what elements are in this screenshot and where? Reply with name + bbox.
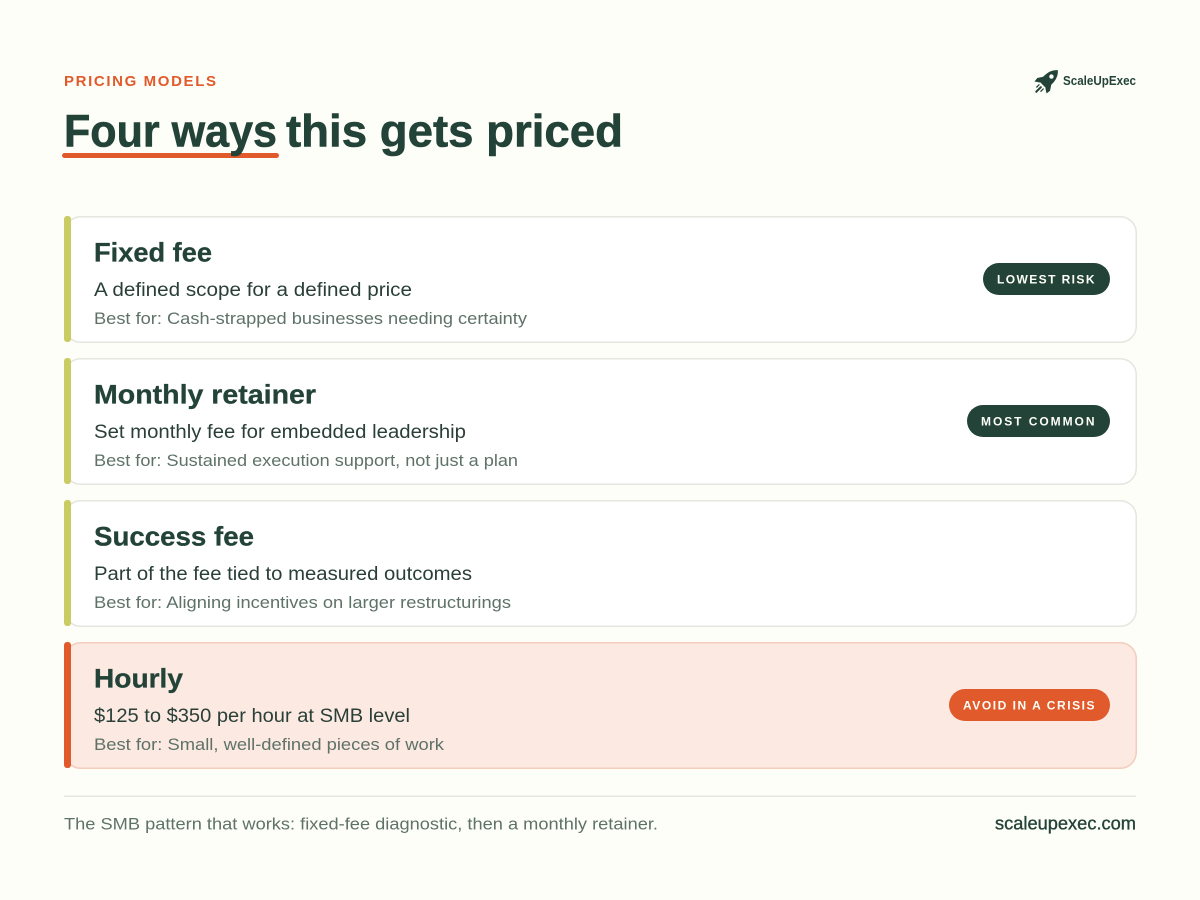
best for: Best for: Aligning incentives on larger restructurings	[94, 594, 511, 612]
badge: avoid in a crisis: AVOID IN A CRISIS	[963, 698, 1094, 712]
card background	[65, 501, 1136, 626]
badge: most common	[967, 405, 1110, 437]
accent bar	[64, 358, 71, 484]
accent bar	[64, 216, 71, 342]
badge: most common: MOST COMMON	[981, 414, 1094, 428]
heading: Success fee	[94, 522, 254, 552]
accent bar	[64, 500, 71, 626]
panel: fixed fee	[64, 216, 1136, 342]
badge: avoid in a crisis	[949, 689, 1110, 721]
accent bar	[64, 642, 71, 768]
title underline	[62, 153, 279, 158]
panel: monthly retainer	[64, 358, 1136, 484]
title	[62, 106, 623, 158]
card background	[65, 359, 1136, 484]
footer note: The SMB pattern that works: fixed-fee diagnostic, then a monthly retainer.	[64, 816, 658, 834]
best for: Best for: Small, well-defined pieces of work	[94, 736, 445, 754]
icon: rocket	[1029, 64, 1064, 99]
description: Set monthly fee for embedded leadership	[94, 422, 466, 443]
heading: Hourly	[94, 664, 183, 694]
heading: Monthly retainer	[94, 380, 317, 410]
description: $125 to $350 per hour at SMB level	[94, 706, 410, 727]
best for: Best for: Sustained execution support, not just a plan	[94, 452, 518, 470]
badge: lowest risk	[983, 263, 1110, 295]
panel: hourly	[64, 642, 1136, 768]
best for: Best for: Cash-strapped businesses needing certainty	[94, 310, 528, 328]
title remaining text: this gets priced	[286, 106, 623, 156]
heading: Fixed fee	[94, 238, 212, 268]
eyebrow label: PRICING MODELS	[64, 73, 216, 90]
title emphasis text: Four ways	[64, 106, 277, 156]
badge: lowest risk: LOWEST RISK	[997, 272, 1095, 286]
description: A defined scope for a defined price	[94, 280, 412, 301]
logo wordmark: ScaleUpExec	[1063, 74, 1136, 88]
card background	[65, 643, 1136, 768]
panel: success fee	[64, 500, 1136, 626]
card background	[65, 217, 1136, 342]
logo	[1029, 64, 1136, 99]
description: Part of the fee tied to measured outcomes	[94, 564, 472, 585]
footer url: scaleupexec.com	[995, 814, 1136, 834]
